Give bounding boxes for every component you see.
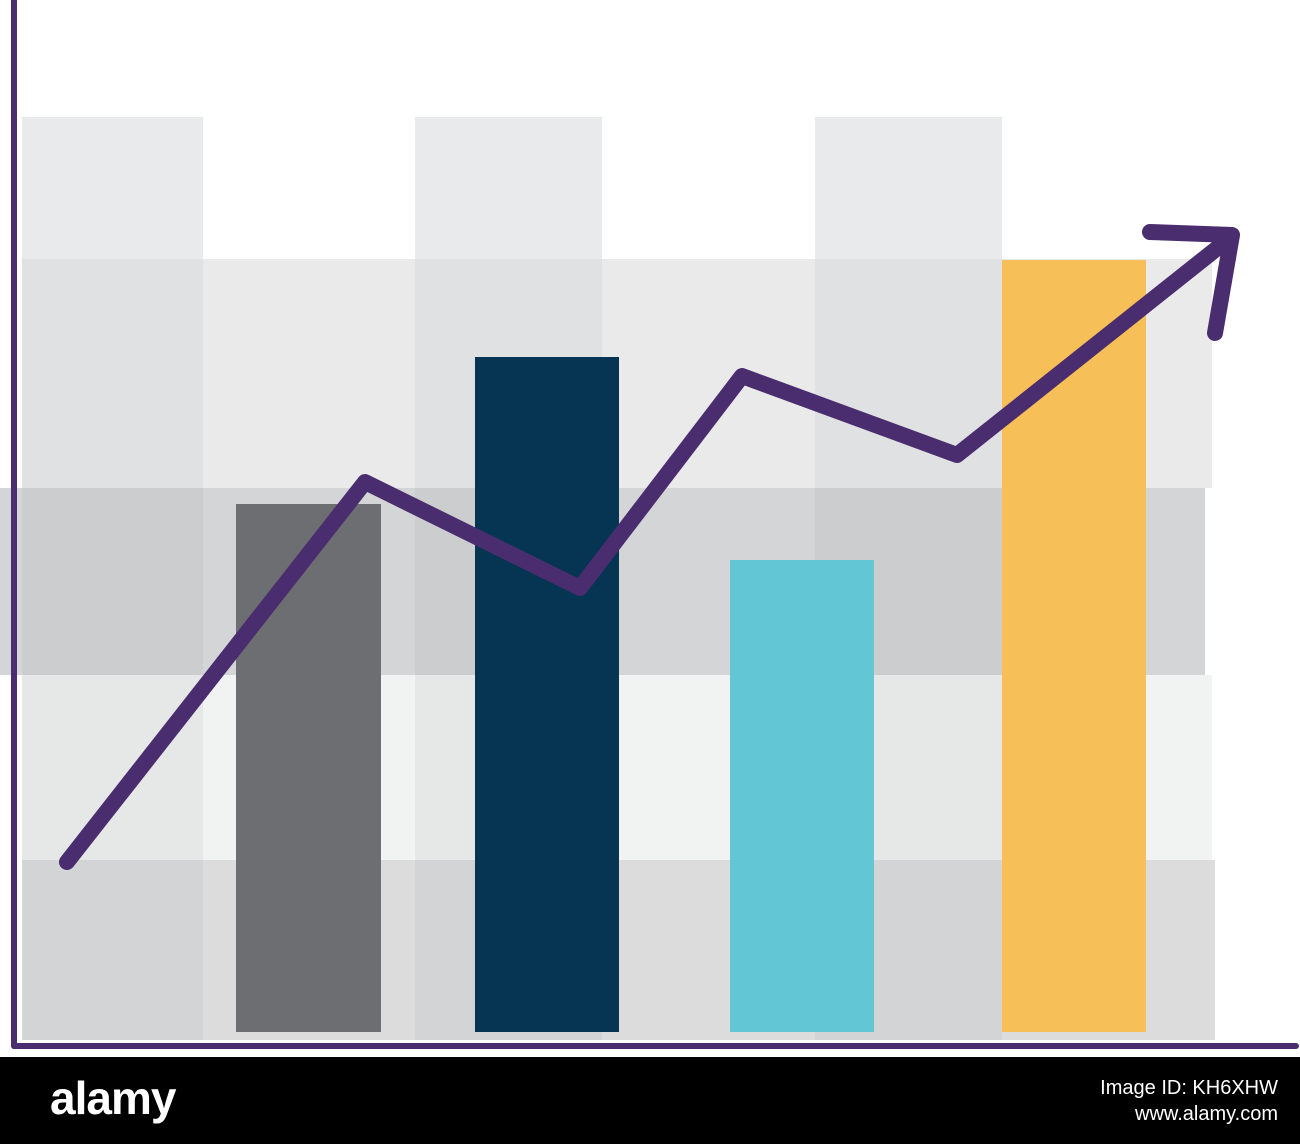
logo text: alamy	[50, 1072, 175, 1124]
image id text	[1100, 1077, 1278, 1125]
bar: cyan	[730, 560, 874, 1032]
bar: yellow	[1002, 260, 1146, 1032]
background grid blocks	[0, 117, 1215, 1040]
image id text: Image ID: KH6XHW	[1100, 1077, 1278, 1099]
footer bar	[0, 1057, 1300, 1144]
bar: navy	[475, 357, 619, 1032]
image id text: www.alamy.com	[1135, 1103, 1278, 1125]
bar: gray	[236, 504, 381, 1032]
trend line arrow	[67, 232, 1232, 862]
